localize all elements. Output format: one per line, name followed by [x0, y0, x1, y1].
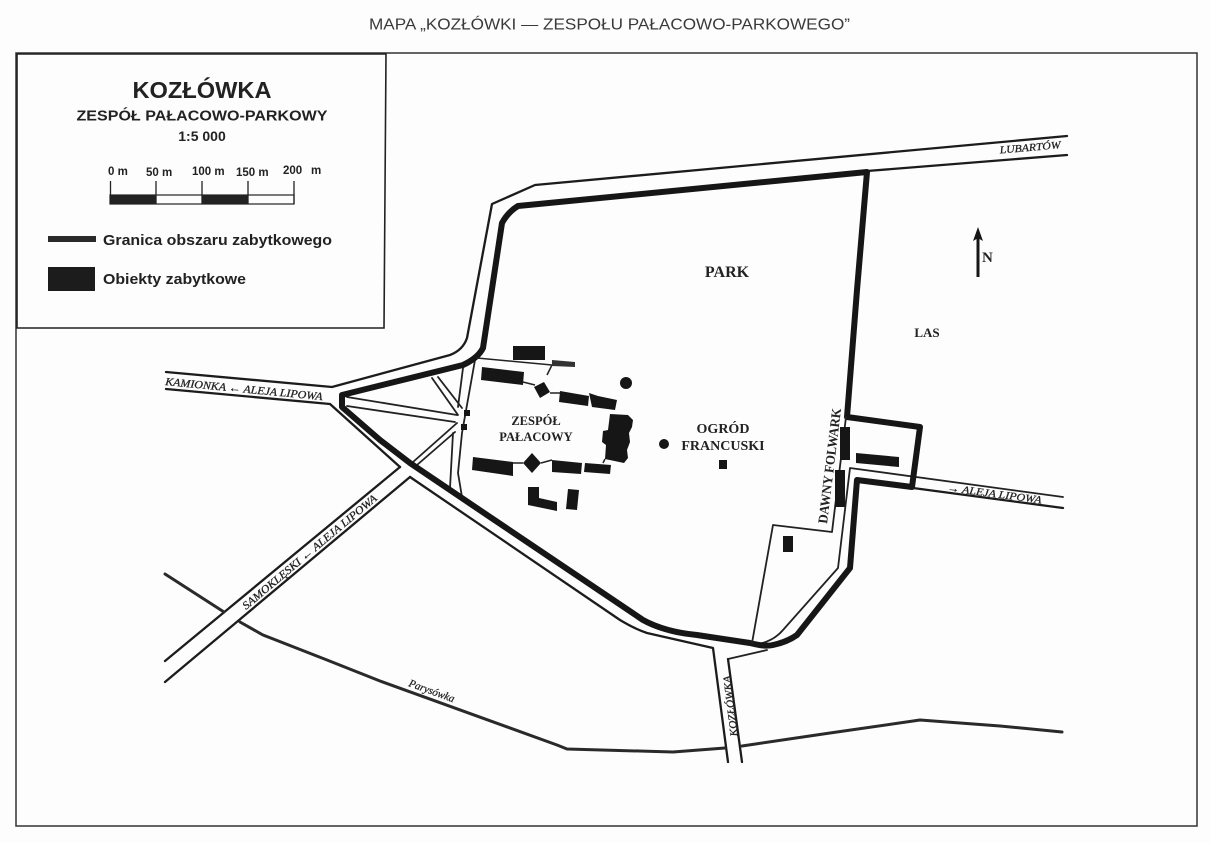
- road network: [165, 136, 1067, 762]
- label: Aleja Lipowa east: → ALEJA LIPOWA: [947, 483, 1043, 506]
- label: PARK: PARK: [705, 264, 750, 281]
- folwark buildings: [783, 427, 899, 552]
- legend subtitle: ZESPÓŁ PAŁACOWO-PARKOWY: [76, 106, 328, 124]
- label: LAS: LAS: [914, 325, 940, 340]
- label: Kozłówka road: KOZŁÓWKA: [721, 674, 741, 738]
- title: MAPA „KOZŁÓWKI — ZESPOŁU PAŁACOWO-PARKOWEGO”: [369, 14, 850, 34]
- road: Lubartów, lower edge: [867, 155, 1067, 171]
- legend item: historic buildings: Obiekty zabytkowe: [103, 271, 246, 288]
- road: Kozłówka east edge: [728, 659, 742, 762]
- perimeter wall lines: [477, 358, 605, 463]
- legend heading: KOZŁÓWKA: [132, 76, 272, 103]
- panel: legend: [17, 54, 386, 328]
- scale bar: 50 m: [146, 167, 172, 179]
- palace complex buildings: [461, 346, 727, 511]
- map scale ratio: 1:5 000: [178, 128, 226, 144]
- label: Samoklęski road: SAMOKLĘSKI ← ALEJA LIPOWA: [240, 492, 380, 612]
- folwark parcel outline: [752, 417, 846, 643]
- label: palace complex: ZESPÓŁ: [511, 414, 561, 428]
- scale bar: 100 m: [192, 166, 225, 178]
- legend item: boundary line: Granica obszaru zabytkowego: [103, 232, 332, 249]
- icon: north arrow: [973, 227, 993, 277]
- scale bar: 200: [283, 165, 302, 177]
- label: French garden: FRANCUSKI: [681, 439, 765, 454]
- road: Kamionka, lower edge, and southern road: [166, 389, 728, 762]
- road: Samoklęski: [165, 467, 410, 682]
- scale bar: 0 m: [108, 166, 128, 178]
- legend item: historic buildings: [48, 267, 246, 291]
- scale bar: [108, 165, 321, 204]
- scale bar: m: [311, 165, 321, 177]
- road: eastern inner edge: [728, 468, 1063, 659]
- label: palace complex: PAŁACOWY: [499, 430, 573, 444]
- boundary of historic area: [342, 172, 920, 646]
- label: Kamionka road: KAMIONKA ← ALEJA LIPOWA: [164, 376, 323, 403]
- label: French garden: OGRÓD: [697, 420, 749, 437]
- scale bar: 150 m: [236, 167, 269, 179]
- road: Lubartów and Kamionka, upper edge: [166, 136, 1067, 387]
- Parysówka river: [165, 574, 1062, 752]
- label: former farmstead: DAWNY FOLWARK: [815, 407, 844, 524]
- label: Lubartów: LUBARTÓW: [998, 139, 1062, 157]
- road: Aleja Lipowa east, lower edge: [913, 488, 1063, 508]
- label: Parysówka river: Parysówka: [406, 677, 457, 705]
- icon: north arrow: N: [982, 250, 993, 266]
- palace approach alleys: [347, 360, 475, 497]
